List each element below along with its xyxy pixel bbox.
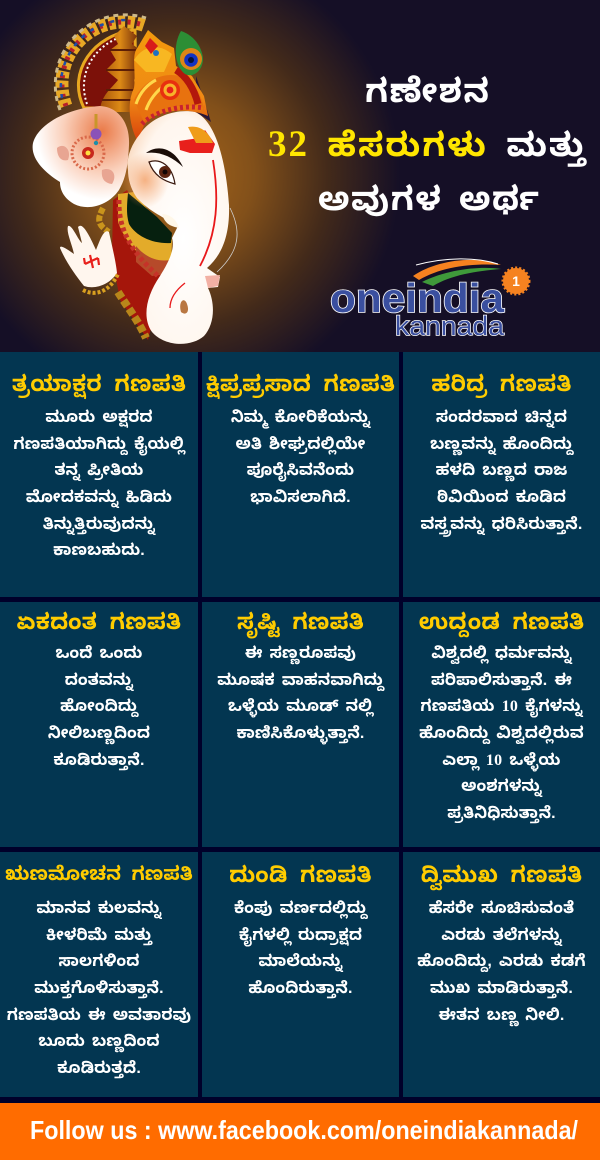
- panel: Uddanda: ಪರಿಪಾಲಿಸುತ್ತಾನೆ. ಈ: [431, 672, 572, 689]
- panel: Haridra: ವಸ್ತ್ರವನ್ನು ಧರಿಸಿರುತ್ತಾನೆ.: [421, 516, 582, 533]
- panel: Kshipra Prasada: ಭಾವಿಸಲಾಗಿದೆ.: [250, 489, 351, 506]
- panel: Kshipra Prasada: ಅತಿ ಶೀಘ್ರದಲ್ಲಿಯೇ: [235, 436, 366, 453]
- panel: Dhundi: ಕೈಗಳಲ್ಲಿ ರುದ್ರಾಕ್ಷದ: [239, 927, 362, 944]
- panel: Runamochana: ಗಣಪತಿಯ ಈ ಅವತಾರವು: [7, 1007, 191, 1024]
- logo: oneindia kannada: kannada: [395, 311, 505, 341]
- tiered tower: [100, 26, 140, 112]
- header banner: [0, 0, 600, 352]
- title line 1: ಗಣೇಶನ: [365, 72, 490, 109]
- logo: oneindia kannada: oneindia: [330, 275, 505, 321]
- panel: Dwimukha: ಹೆಸರೇ ಸೂಚಿಸುವಂತೆ: [429, 900, 574, 917]
- panel: Ekadanta: ಒಂದೆ ಒಂದು: [56, 645, 142, 662]
- panel: Dwimukha: ಹೊಂದಿದ್ದು, ಎರಡು ಕಡಗೆ: [417, 953, 586, 970]
- panel: Runamochana: ಬೂದು ಬಣ್ಣದಿಂದ: [38, 1033, 160, 1050]
- panel: Srishti: ಕಾಣಿಸಿಕೊಳ್ಳುತ್ತಾನೆ.: [236, 725, 365, 742]
- panel: Trayakshara: ಕಾಣಬಹುದು.: [53, 542, 145, 559]
- title: [268, 72, 587, 217]
- panel: Ekadanta: ಹೋಂದಿದ್ದು: [60, 698, 138, 715]
- panel: Kshipra Prasada: ಪೂರೈಸಿವನೆಂದು: [247, 462, 354, 479]
- panel: Runamochana: [0, 852, 198, 1097]
- panel: Uddanda: ಹೊಂದಿದ್ದು ವಿಶ್ವದಲ್ಲಿರುವ: [419, 725, 584, 742]
- panel: Srishti: ಒಳ್ಳೆಯ ಮೂಡ್ ನಲ್ಲಿ: [228, 698, 373, 715]
- panel: Trayakshara: ಮೂರು ಅಕ್ಷರದ: [45, 409, 153, 426]
- panel: Trayakshara: ತ್ರಯಾಕ್ಷರ ಗಣಪತಿ: [12, 371, 186, 396]
- panel: Haridra: ಸಂದರವಾದ ಚಿನ್ನದ: [436, 409, 567, 426]
- panel: Runamochana: ಋಣಮೋಚನ ಗಣಪತಿ: [5, 864, 193, 885]
- panel: Ekadanta: ದಂತವನ್ನು: [65, 672, 133, 689]
- panel: Trayakshara: ತಿನ್ನುತ್ತಿರುವುದನ್ನು: [43, 516, 155, 533]
- panel: Trayakshara: ತನ್ನ ಪ್ರೀತಿಯ: [55, 462, 143, 479]
- title line 2: 32 ಹೆಸರುಗಳು ಮತ್ತು: [268, 124, 587, 165]
- crown: [130, 30, 211, 142]
- panel: Dhundi: ಹೊಂದಿರುತ್ತಾನೆ.: [248, 980, 353, 997]
- panel: Trayakshara: ಗಣಪತಿಯಾಗಿದ್ದು ಕೈಯಲ್ಲಿ: [13, 436, 185, 453]
- raised hand: [60, 226, 118, 293]
- elephant face and trunk: [121, 111, 237, 344]
- panel: Ekadanta: ನೀಲಿಬಣ್ಣದಿಂದ: [48, 725, 150, 742]
- panel: Runamochana: ಕೀಳರಿಮೆ ಮತ್ತು: [46, 927, 152, 944]
- panel: Haridra: ಹಳದಿ ಬಣ್ಣದ ರಾಜ: [436, 462, 567, 479]
- panel: Ekadanta: ಏಕದಂತ ಗಣಪತಿ: [17, 609, 181, 634]
- panel: Runamochana: ಮುಕ್ತಗೊಳಿಸುತ್ತಾನೆ.: [34, 980, 164, 997]
- panel: Srishti: [202, 602, 399, 847]
- panel: Srishti: ಈ ಸಣ್ಣರೂಪವು: [245, 645, 356, 662]
- title line 3: ಅವುಗಳ ಅರ್ಥ: [318, 180, 540, 217]
- panel: Dwimukha: ಮುಖ ಮಾಡಿರುತ್ತಾನೆ.: [430, 980, 573, 997]
- garland and robe: [99, 190, 172, 340]
- panel: Dwimukha: [403, 852, 600, 1097]
- panel: Trayakshara: ಮೋದಕವನ್ನು ಹಿಡಿದು: [26, 489, 172, 506]
- panel: Dwimukha: ಎರಡು ತಲೆಗಳನ್ನು: [441, 927, 562, 944]
- panel: Trayakshara: [0, 352, 198, 597]
- panel: Uddanda: [403, 602, 600, 847]
- panel: Runamochana: ಸಾಲಗಳಿಂದ: [58, 953, 140, 970]
- panel: Uddanda: ಉದ್ದಂಡ ಗಣಪತಿ: [419, 609, 584, 634]
- panel: Dhundi: ಮಾಲೆಯನ್ನು: [258, 953, 343, 970]
- panel: Uddanda: ಪ್ರತಿನಿಧಿಸುತ್ತಾನೆ.: [447, 805, 556, 822]
- logo: oneindia kannada: [330, 258, 530, 341]
- panel: Haridra: ಠಿವಿಯಿಂದ ಕೂಡಿದ: [437, 489, 566, 506]
- panel: Ekadanta: [0, 602, 198, 847]
- panel: Dwimukha: ದ್ವಿಮುಖ ಗಣಪತಿ: [421, 862, 582, 887]
- panel: Srishti: ಸೃಷ್ಟಿ ಗಣಪತಿ: [237, 609, 364, 634]
- panel: Uddanda: ವಿಶ್ವದಲ್ಲಿ ಧರ್ಮವನ್ನು: [431, 645, 572, 662]
- panel: Srishti: ಮೂಷಕ ವಾಹನವಾಗಿದ್ದು: [217, 672, 384, 689]
- halo ring: [55, 15, 146, 110]
- panel: Ekadanta: ಕೂಡಿರುತ್ತಾನೆ.: [53, 752, 145, 769]
- panel: Runamochana: ಮಾನವ ಕುಲವನ್ನು: [37, 900, 161, 917]
- panel: Uddanda: ಗಣಪತಿಯ 10 ಕೈಗಳನ್ನು: [420, 698, 583, 715]
- panel: Haridra: ಹರಿದ್ರ ಗಣಪತಿ: [431, 371, 572, 396]
- footer: follow us: [0, 1103, 600, 1160]
- logo: oneindia kannada: 1: [512, 273, 520, 289]
- panel: Dhundi: ಕೆಂಪು ವರ್ಣದಲ್ಲಿದ್ದು: [234, 900, 367, 917]
- panel: Runamochana: ಕೂಡಿರುತ್ತದೆ.: [57, 1060, 141, 1077]
- panel: Kshipra Prasada: ಕ್ಷಿಪ್ರಪ್ರಸಾದ ಗಣಪತಿ: [206, 371, 395, 396]
- peacock feather: [176, 31, 203, 75]
- panel: Haridra: ಬಣ್ಣವನ್ನು ಹೊಂದಿದ್ದು: [430, 436, 573, 453]
- ear: [33, 106, 129, 207]
- panel: Haridra: [403, 352, 600, 597]
- panel: Dwimukha: ಈತನ ಬಣ್ಣ ನೀಲಿ.: [439, 1007, 564, 1024]
- panel: Uddanda: ಎಲ್ಲಾ 10 ಒಳ್ಳೆಯ: [442, 752, 561, 769]
- panel: Kshipra Prasada: ನಿಮ್ಮ ಕೋರಿಕೆಯನ್ನು: [231, 409, 370, 426]
- panel: Dhundi: [202, 852, 399, 1097]
- panel: Kshipra Prasada: [202, 352, 399, 597]
- panel: Dhundi: ದುಂಡಿ ಗಣಪತಿ: [229, 862, 372, 887]
- panel: Uddanda: ಅಂಶಗಳನ್ನು: [461, 778, 542, 795]
- illustration: Ganesha head: [32, 13, 238, 344]
